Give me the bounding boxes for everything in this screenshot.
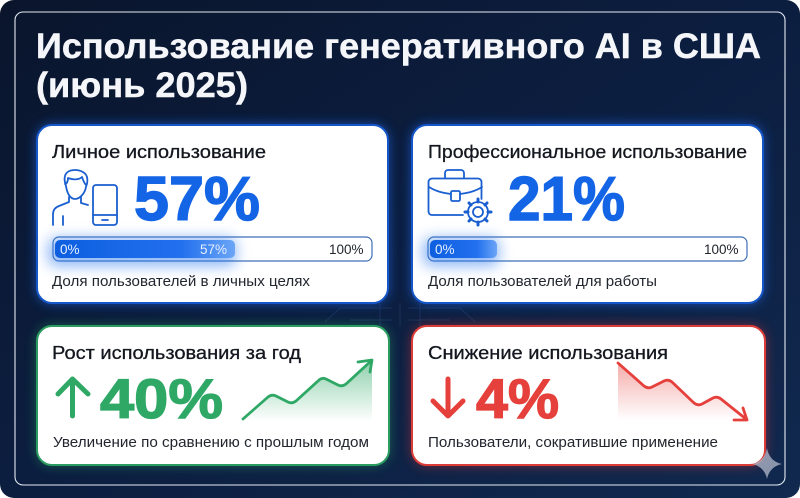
panel: yearly growth [37, 326, 389, 465]
caption: personal: Доля пользователей в личных целях [52, 274, 311, 290]
big number 57%: 57% [134, 165, 260, 234]
heading: professional use: Профессиональное использование [428, 141, 747, 162]
progress bar 57%: 57% [200, 242, 227, 257]
progress bar 57%: 100% [329, 242, 364, 257]
heading: growth: Рост использования за год [52, 342, 301, 363]
heading: personal use: Личное использование [52, 141, 266, 162]
progress bar 57%: 0% [60, 242, 80, 257]
heading: decline: Снижение использования [428, 342, 668, 363]
icon: up arrow [58, 379, 88, 416]
title: Использование генеративного AI в США [36, 26, 761, 66]
panel: usage decline [412, 326, 765, 465]
big number 21%: 21% [508, 165, 625, 234]
panel: professional use [412, 125, 763, 303]
chart: falling line [618, 363, 747, 420]
caption: growth: Увеличение по сравнению с прошлым годом [53, 435, 369, 451]
progress bar 21%: 0% [435, 242, 455, 257]
progress bar 57% [48, 237, 372, 266]
caption: decline: Пользователи, сократившие применение [428, 435, 718, 451]
title: (июнь 2025) [36, 65, 248, 105]
icon: down arrow [433, 379, 463, 416]
progress bar 21%: 100% [704, 242, 739, 257]
title [36, 26, 761, 105]
big number 4%: 4% [476, 367, 559, 430]
big number 40%: 40% [100, 367, 223, 430]
icon: person with phone [53, 170, 117, 225]
progress bar 21% [423, 237, 747, 266]
caption: professional: Доля пользователей для работы [428, 274, 657, 290]
panel: personal use [37, 125, 388, 303]
icon: briefcase with gear [428, 170, 491, 225]
chart: rising line [243, 360, 372, 421]
icon: sparkle star [752, 448, 782, 479]
